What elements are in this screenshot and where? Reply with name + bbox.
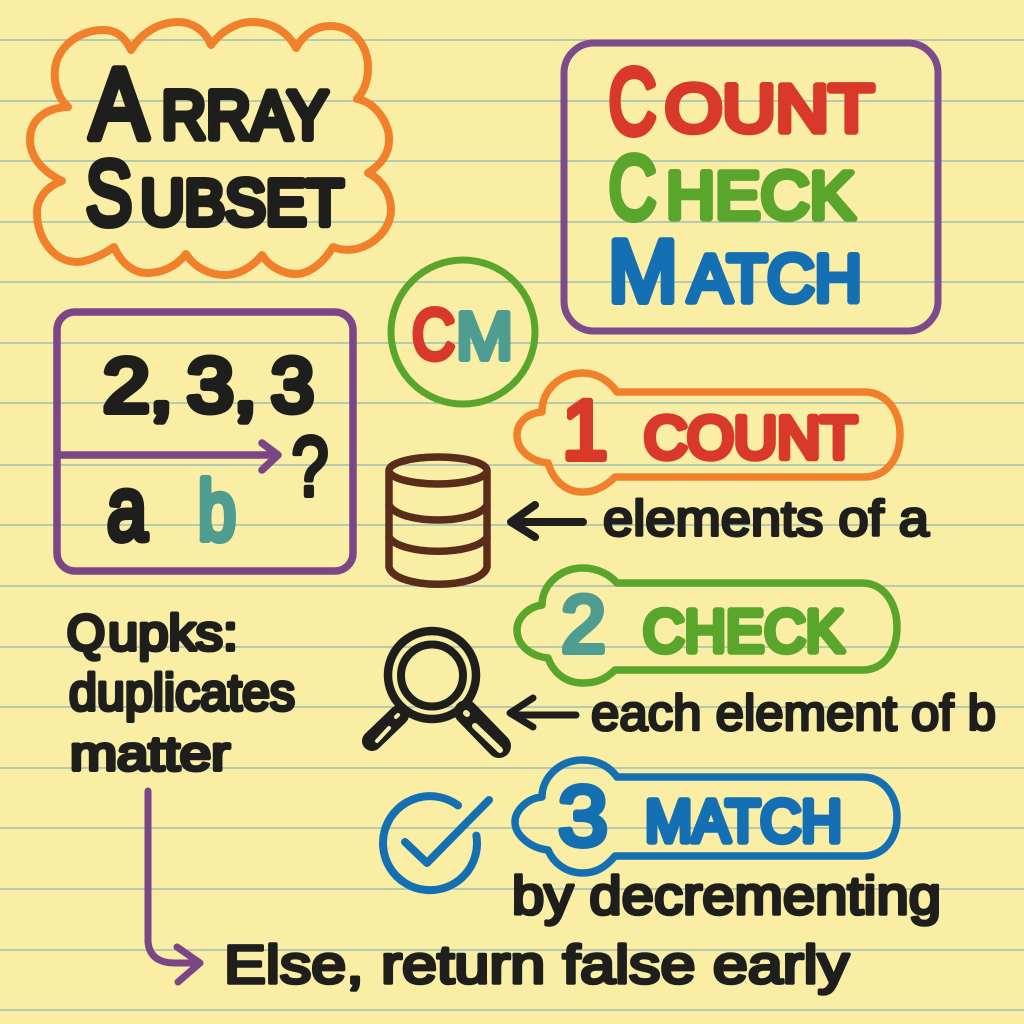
label b: b [198,464,236,558]
word: check [608,138,855,238]
arrow: a to b [58,443,278,470]
arrow: note to else [148,791,200,982]
word: count [608,50,874,154]
note: duplicates matter: matter [70,728,230,781]
text: each element of b: each element of b [591,685,996,741]
word: check: HECK [666,158,855,234]
step 2 pill: 2 [561,580,606,670]
step 2 pill [517,568,897,683]
badge: CM: C [412,296,455,375]
note: duplicates matter [67,605,295,781]
step 1 pill: COUNT [644,405,857,471]
question mark: ? [292,420,328,514]
word: match [608,222,862,320]
numbers: 2, [103,344,173,428]
note: duplicates matter: Q [67,605,105,661]
numbers [103,344,314,428]
word: match: M [608,222,678,320]
frame [57,312,353,571]
step 2 pill: CHECK [643,598,844,664]
panel: title cloud [30,22,391,275]
note: duplicates matter: upks: [108,605,238,661]
label a: a [107,460,148,560]
word: count: OUNT [665,72,874,146]
numbers: 3, [187,344,257,428]
frame [564,43,938,331]
step 1 pill [517,373,900,492]
title text: S [86,142,132,244]
badge: CM: M [456,299,513,374]
title text: A [90,48,148,160]
title text: RRAY [162,78,328,154]
icon: check circle [383,796,489,890]
step 3 pill: MATCH [645,788,842,854]
text: else return false early: Else, return false early [224,935,849,995]
title text: UBSET [140,166,344,238]
arrow to elements of a [511,505,583,537]
cloud outline [30,22,391,275]
title text [86,48,344,244]
text: elements of a: elements of a [603,490,929,546]
panel: count check match [564,43,938,331]
word: count: C [608,50,656,154]
word: check: C [608,138,656,238]
numbers: 3 [271,344,314,428]
step 3 pill: 3 [558,769,608,863]
step 1 pill: 1 [562,383,608,477]
step 3 pill [515,760,897,873]
panel: array example [57,312,353,571]
badge: CM [391,260,535,404]
text: by decrementing: by decrementing [512,866,941,926]
note: duplicates matter: duplicates [69,664,295,722]
arrow to each element [510,698,576,727]
word: match: ATCH [688,242,862,316]
icon: magnifier [372,631,500,750]
icon: database [389,457,487,584]
